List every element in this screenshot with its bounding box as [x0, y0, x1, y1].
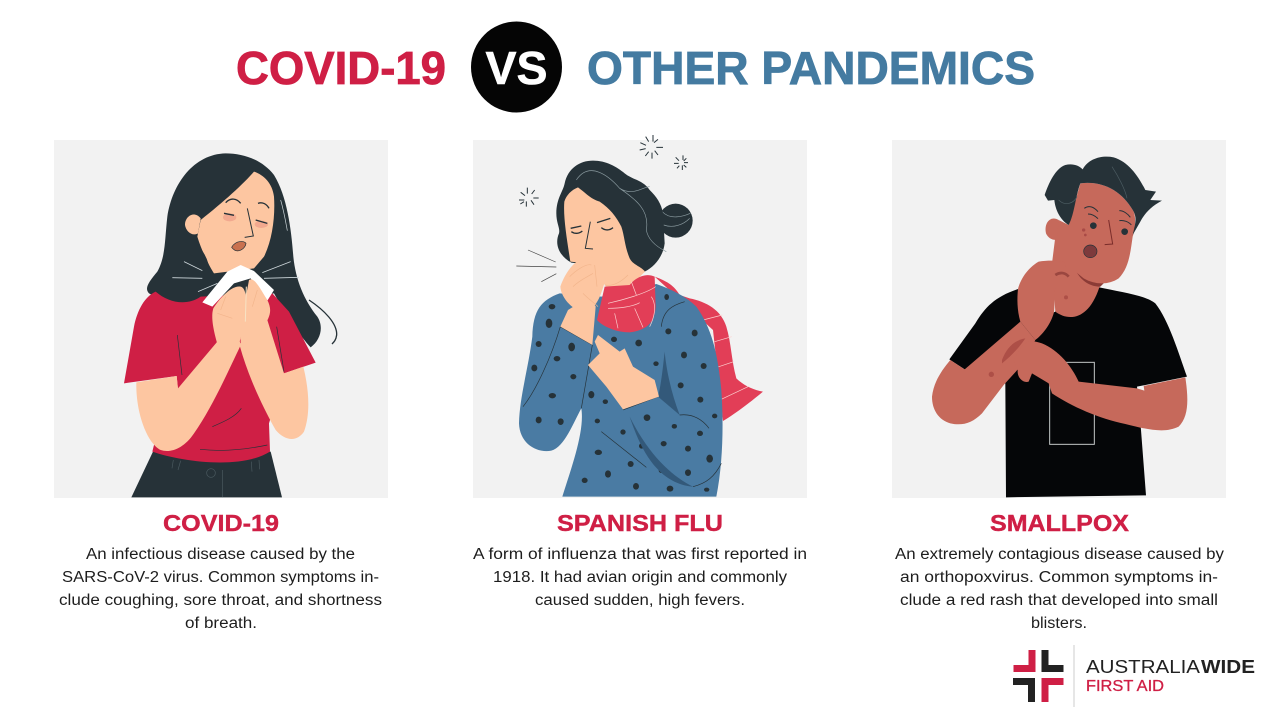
cough lines	[516, 250, 556, 282]
description: SARS-CoV-2 virus. Common symptoms in-	[62, 569, 379, 586]
logo wordmark	[1086, 656, 1255, 695]
coughing arm and hand	[560, 297, 596, 345]
sweater	[519, 284, 723, 497]
logo wordmark: FIRST AID	[1086, 678, 1164, 695]
hair bun	[659, 204, 693, 238]
neck and face	[197, 172, 274, 273]
description: clude a red rash that developed into small	[900, 592, 1218, 609]
upper arm left	[932, 322, 1035, 424]
description: 1918. It had avian origin and commonly	[493, 569, 787, 586]
description: blisters.	[1031, 615, 1087, 632]
heading: SMALLPOX	[990, 510, 1130, 536]
badge: VS: VS	[486, 42, 548, 94]
logo: australia wide first aid	[1013, 645, 1255, 707]
chest hand	[588, 335, 659, 409]
hair	[556, 161, 665, 272]
cough lines	[172, 262, 299, 292]
panel: smallpox illustration	[892, 140, 1226, 498]
description	[473, 546, 807, 609]
arms	[136, 342, 240, 451]
tissue	[202, 265, 274, 307]
face and neck	[564, 187, 645, 287]
logo cross icon	[1013, 650, 1064, 702]
scarf front	[597, 275, 656, 332]
description: A form of influenza that was first reported in	[473, 546, 807, 563]
face features	[571, 218, 613, 233]
heading: SPANISH FLU	[557, 510, 723, 536]
description	[895, 546, 1224, 632]
sweater dots	[531, 294, 717, 492]
sparkles	[519, 135, 688, 207]
ear	[1046, 219, 1060, 240]
hair	[147, 153, 321, 347]
description: An infectious disease caused by the	[86, 546, 355, 563]
panel: spanish flu illustration	[473, 135, 807, 498]
panel: covid-19 illustration	[54, 140, 388, 498]
description: clude coughing, sore throat, and shortness	[59, 592, 382, 609]
description: caused sudden, high fevers.	[535, 592, 745, 609]
hair	[1045, 157, 1162, 235]
shirt	[124, 292, 316, 463]
t-shirt	[949, 287, 1187, 497]
caption: smallpox	[895, 510, 1224, 632]
description	[59, 546, 382, 632]
title: other pandemics: OTHER PANDEMICS	[587, 42, 1035, 94]
badge: VS	[471, 22, 562, 112]
face features	[223, 199, 269, 251]
heading: COVID-19	[163, 510, 279, 536]
neck	[1052, 237, 1105, 317]
scarf back	[655, 277, 763, 421]
pants	[131, 452, 282, 497]
face	[1057, 183, 1135, 283]
caption: covid-19	[59, 510, 382, 632]
hands	[212, 287, 246, 344]
rash	[1002, 338, 1025, 363]
caption: spanish flu	[473, 510, 807, 609]
description: of breath.	[185, 615, 257, 632]
raised hand	[1017, 261, 1066, 340]
title: COVID-19: COVID-19	[236, 42, 446, 94]
lower arm right	[1014, 341, 1187, 430]
description: An extremely contagious disease caused by	[895, 546, 1224, 563]
pocket	[1050, 362, 1094, 444]
description: an orthopoxvirus. Common symptoms in-	[900, 569, 1218, 586]
sweater folds	[658, 352, 680, 415]
face features	[1082, 207, 1131, 258]
logo wordmark: AUSTRALIA	[1086, 656, 1201, 677]
title	[236, 22, 1035, 112]
logo wordmark: WIDE	[1201, 656, 1255, 677]
